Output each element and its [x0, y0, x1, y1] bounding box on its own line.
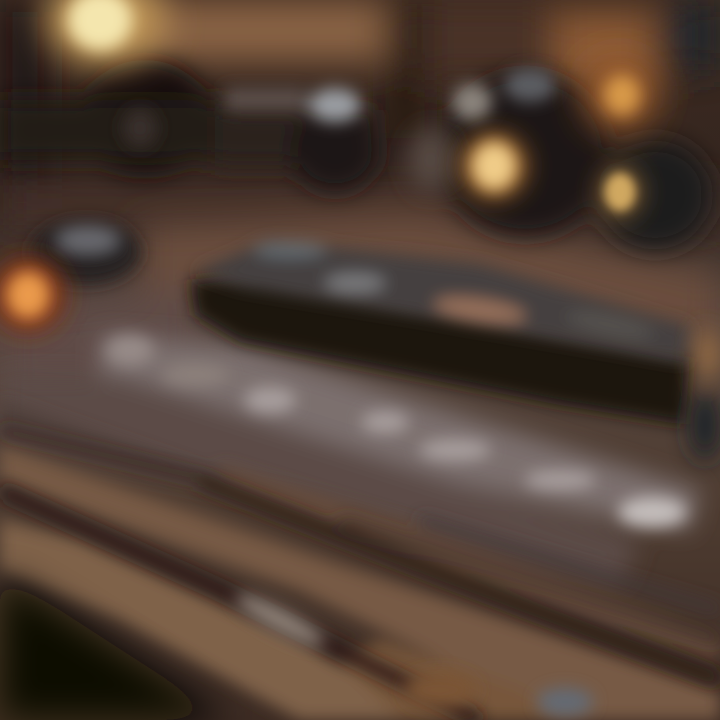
bar top surface [195, 240, 690, 362]
glow: orange upper right [584, 59, 656, 131]
dark lens sphere right [408, 73, 713, 250]
cloth highlights [106, 335, 686, 527]
wooden planks [0, 400, 720, 720]
plank highlights [231, 587, 593, 716]
tabletop far edge [0, 210, 720, 420]
light cloth band [0, 335, 700, 585]
wall backdrop [0, 0, 720, 225]
camera highlights [122, 88, 361, 148]
lens highlights [452, 68, 556, 121]
glow: lamp top left [45, 0, 165, 65]
plank grooves [0, 430, 720, 720]
right edge object [690, 329, 720, 461]
small gray object left [30, 220, 140, 284]
glow: yellow right [598, 166, 642, 218]
dark bar object [190, 272, 690, 425]
left dark camera [0, 60, 380, 192]
dark corner lower left [0, 575, 230, 720]
glow: orange left [0, 257, 66, 333]
glow: lens centre [460, 132, 528, 200]
